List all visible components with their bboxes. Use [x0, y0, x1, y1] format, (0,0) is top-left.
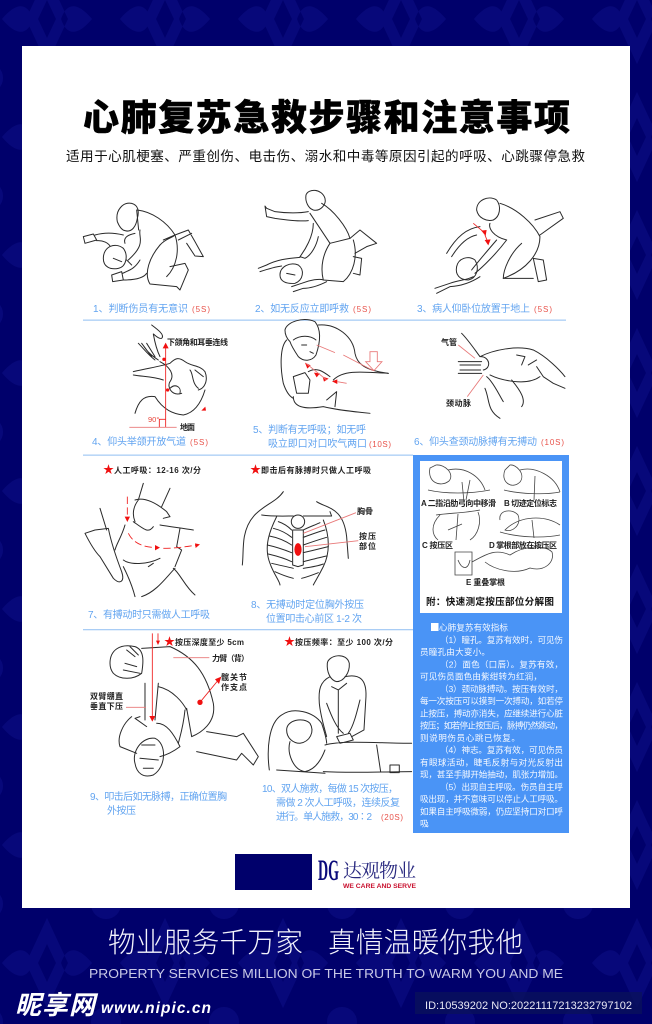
footer slogan chinese: 真情温暖你我他 — [328, 927, 523, 958]
diagram labels: E 重叠掌根 — [466, 577, 505, 587]
label: straight arms — [90, 691, 123, 711]
divider — [83, 454, 413, 456]
caption 9: 9、叩击后如无脉搏，正确位置胸 — [90, 790, 227, 803]
star heading 8: 即击后有脉搏时只做人工呼吸 — [261, 465, 371, 475]
company name: 达观物业 — [343, 860, 416, 882]
white square bullet — [431, 623, 438, 631]
indicators copy: 止按压，搏动亦消失，应继续进行心脏 — [420, 707, 563, 718]
indicators copy: （3）颈动脉搏动。按压有效时， — [440, 683, 563, 694]
label: straight arms: 双臂绷直 — [90, 691, 123, 701]
indicators copy: 则说明伤员心跳已恢复。 — [420, 732, 520, 743]
caption 10: 进行。单人施救，30∶2 — [276, 810, 372, 823]
text block: resuscitation indicators — [420, 622, 563, 828]
logo block — [235, 854, 416, 890]
indicators copy: 现，甚至手脚开始抽动，肌张力增加。 — [420, 768, 563, 780]
step 7: rescue breathing — [85, 464, 210, 621]
red breath arrows — [125, 497, 200, 550]
sidebar background — [413, 455, 569, 833]
time 10: (20S) — [381, 813, 403, 822]
divider — [83, 629, 413, 630]
label: trachea: 气管 — [441, 337, 457, 347]
time 6: (10S) — [541, 438, 564, 447]
step 3: lay patient flat — [417, 198, 563, 315]
diagram figures A to E — [428, 465, 560, 575]
red arrows — [473, 223, 491, 245]
indicators copy: （4）神志。复苏有效，可见伤员 — [440, 744, 563, 755]
caption 9: 外按压 — [107, 804, 136, 817]
step 2: call for help — [255, 190, 377, 315]
indicators copy: 有眼球活动，睫毛反射与对光反射出 — [420, 756, 563, 767]
label: compression site — [359, 531, 376, 551]
star heading 10: 按压频率：至少 100 次/分 — [295, 637, 393, 647]
caption 1: 1、判断伤员有无意识 — [93, 302, 188, 315]
label: 90 degrees: 90° — [148, 415, 159, 424]
caption 7: 7、有搏动时只需做人工呼吸 — [88, 608, 210, 621]
label: arm: 力臂（背） — [212, 653, 249, 663]
star heading 7 — [103, 464, 201, 476]
star heading 9: ★ — [164, 636, 175, 648]
illustration: rib cage — [242, 492, 348, 585]
star heading 7: 人工呼吸：12-16 次/分 — [114, 465, 201, 475]
caption 5: 5、判断有无呼吸；如无呼 — [253, 423, 366, 436]
time 4: (5S) — [190, 438, 208, 447]
indicators copy: （1）瞳孔。复苏有效时，可见伤 — [440, 634, 563, 645]
diagram labels: A 二指沿肋弓向中移滑 — [421, 498, 496, 508]
label: jaw line: 下颌角和耳垂连线 — [167, 337, 228, 347]
label: hip pivot: 作支点 — [221, 682, 247, 692]
watermark: nipic — [15, 990, 211, 1020]
illustration: carotid check — [458, 333, 565, 418]
label: hip pivot — [221, 672, 247, 692]
illustration: open airway — [133, 325, 206, 415]
star heading 8: ★ — [250, 464, 261, 476]
label: straight arms: 垂直下压 — [90, 701, 123, 711]
red ground line — [129, 426, 177, 429]
caption 10: 10、双人施救，每做 15 次按压， — [262, 782, 398, 795]
diagram labels — [421, 498, 557, 587]
white content panel — [22, 46, 630, 908]
indicators copy: （5）出现自主呼吸。伤员自主呼 — [440, 781, 563, 792]
caption 10: 需做 2 次人工呼吸，连续反复 — [276, 796, 400, 809]
indicators copy — [420, 622, 563, 828]
company slogan: WE CARE AND SERVE — [343, 884, 416, 890]
illustration: head tilt with breath — [85, 483, 195, 597]
pale red sight lines — [306, 345, 382, 383]
time 2: (5S) — [353, 305, 371, 314]
caption 9 — [90, 790, 227, 817]
logo block: DG — [318, 854, 339, 887]
star heading 9 — [164, 636, 244, 648]
illustration: compression posture — [110, 646, 258, 776]
time 5: (10S) — [369, 440, 391, 449]
caption 10 — [262, 782, 400, 823]
time 3: (5S) — [534, 305, 552, 314]
footer slogan chinese — [108, 927, 523, 958]
indicators copy: 心肺复苏有效指标 — [439, 622, 508, 632]
step 4: head tilt chin lift — [92, 325, 228, 448]
pale red pointer lines — [458, 345, 483, 397]
watermark: image id — [415, 992, 642, 1014]
white diagram background — [420, 461, 562, 613]
star heading 10 — [284, 636, 393, 648]
star heading 7: ★ — [103, 464, 114, 476]
label: sternum: 胸骨 — [357, 506, 373, 516]
step 8: locate chest compression — [242, 464, 376, 625]
illustration: two rescuers — [268, 656, 412, 773]
red guide arrows — [149, 633, 221, 722]
caption 5 — [253, 423, 367, 450]
step 10: two-person rescue — [262, 636, 412, 823]
caption 8: 8、无搏动时定位胸外按压 — [251, 598, 364, 611]
label: compression site: 部位 — [359, 541, 376, 551]
label: hip pivot: 髋关节 — [221, 672, 247, 682]
star heading 10: ★ — [284, 636, 295, 648]
indicators copy: 每一次按压可以摸到一次搏动，如若停 — [420, 695, 563, 706]
pointer lines — [303, 513, 358, 547]
illustration: rescuer taps patient — [83, 203, 203, 290]
indicators copy: 如果自主呼吸微弱，仍应坚持口对口呼 — [420, 805, 563, 816]
caption 2: 2、如无反应立即呼救 — [255, 302, 349, 315]
diagram caption: 附：快速测定按压部位分解图 — [426, 596, 554, 608]
caption 8 — [251, 598, 364, 625]
step 1: check consciousness — [83, 203, 210, 315]
watermark: nipic: www.nipic.cn — [101, 1000, 211, 1017]
caption 8: 位置叩击心前区 1-2 次 — [266, 612, 362, 625]
diagram labels: D 掌根部放在按压区 — [489, 540, 557, 550]
caption 5: 吸立即口对口吹气两口 — [268, 437, 367, 450]
label: ground: 地面 — [180, 422, 195, 432]
illustration: mouth to mouth — [281, 320, 388, 413]
illustration: rescuer positions patient — [435, 198, 563, 293]
label: compression site: 按压 — [359, 531, 376, 541]
red arrows and hollow arrow — [305, 363, 337, 384]
illustration: rescuer calls for help — [258, 190, 377, 292]
indicators copy: 吸出现，并不意味可以停止人工呼吸。 — [420, 793, 563, 804]
panel: blue sidebar — [413, 455, 569, 833]
step 9: chest compressions — [90, 633, 258, 817]
star heading 8 — [250, 464, 371, 476]
navy logo rectangle — [235, 854, 312, 890]
time 1: (5S) — [192, 305, 210, 314]
indicators copy: 员瞳孔由大变小。 — [420, 646, 490, 657]
diagram labels: C 按压区 — [422, 540, 453, 550]
indicators copy: 可见伤员面色由紫绀转为红润， — [420, 670, 542, 682]
indicators copy: 按压；如若停止按压后，脉搏仍然跳动， — [420, 720, 563, 730]
watermark: nipic: 昵享网 — [15, 990, 99, 1020]
pointer lines — [126, 658, 209, 707]
caption 4: 4、仰头举颌开放气道 — [92, 435, 186, 448]
step 5: check breathing and give breaths — [253, 320, 391, 450]
red angle guides — [159, 343, 206, 427]
diagram labels: B 切迹定位标志 — [504, 498, 557, 508]
star heading 9: 按压深度至少 5cm — [175, 637, 244, 647]
caption 3: 3、病人仰卧位放置于地上 — [417, 302, 530, 315]
indicators copy: 吸。 — [420, 818, 434, 828]
indicators copy: （2）面色（口唇）。复苏有效， — [440, 658, 563, 669]
watermark: image id: ID:10539202 NO:20221117213232797102 — [425, 1000, 632, 1012]
title: 心肺复苏急救步骤和注意事项 — [83, 97, 570, 138]
label: carotid: 颈动脉 — [446, 398, 471, 408]
panel: compression location diagram — [420, 461, 562, 613]
red compression point — [294, 543, 302, 556]
step 6: check carotid pulse — [414, 333, 565, 448]
subtitle: 适用于心肌梗塞、严重创伤、电击伤、溺水和中毒等原因引起的呼吸、心跳骤停急救 — [66, 148, 585, 164]
footer slogan chinese: 物业服务千万家 — [108, 927, 303, 958]
divider — [83, 320, 566, 321]
caption 6: 6、仰头查颈动脉搏有无搏动 — [414, 435, 537, 448]
footer slogan english: PROPERTY SERVICES MILLION OF THE TRUTH TO WARM YOU AND ME — [89, 967, 563, 981]
